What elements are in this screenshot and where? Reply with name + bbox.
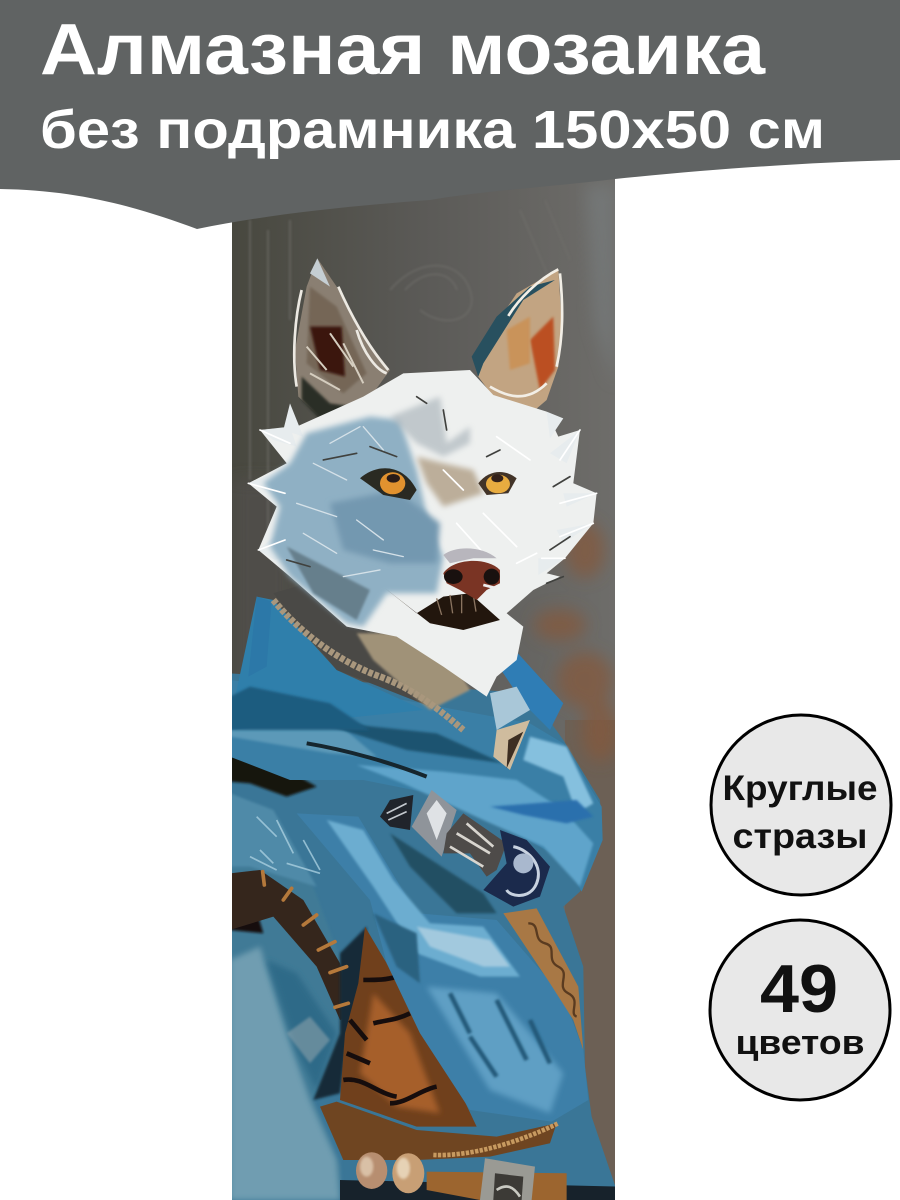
dark folds	[230, 755, 317, 797]
mouth and beard	[385, 588, 500, 630]
left sleeve	[230, 793, 343, 1200]
collar interior	[320, 613, 426, 705]
head fur silhouette	[248, 370, 597, 697]
lacing toggles	[263, 872, 348, 1007]
badge: 49 colours	[710, 920, 890, 1100]
rope collar	[273, 600, 463, 730]
silver buckle	[480, 1158, 535, 1200]
painted background	[232, 170, 618, 1200]
body base	[230, 673, 620, 1200]
badge: round rhinestones: Круглые	[722, 769, 878, 808]
central shirt	[297, 813, 588, 1122]
cloak left part	[230, 597, 423, 730]
blue collar right	[502, 654, 564, 730]
badge: 49 colours: цветов	[736, 1024, 864, 1062]
collar inner	[493, 720, 530, 770]
right ear	[472, 269, 562, 420]
left ear	[294, 258, 390, 427]
belt and rope	[320, 1102, 620, 1200]
round studs	[356, 1152, 424, 1193]
blue-grey shaded side of face	[263, 417, 443, 627]
fur strokes	[248, 430, 597, 563]
sleeve highlights	[250, 817, 320, 873]
left eye	[360, 468, 417, 500]
shadow under arm	[390, 833, 497, 913]
silver arm guard and bracer	[380, 790, 550, 907]
forehead markings	[390, 397, 470, 457]
upper body group	[230, 673, 620, 1200]
tan brow	[417, 457, 483, 507]
carved leather strap	[503, 908, 583, 1050]
portrait painting: dog in blue cloak	[230, 170, 620, 1200]
header banner	[0, 0, 900, 229]
right eye	[478, 472, 517, 495]
badge: 49 colours: 49	[760, 951, 838, 1027]
orange vest	[340, 927, 477, 1127]
badge: round rhinestones	[711, 715, 891, 895]
badge: round rhinestones: стразы	[732, 817, 868, 856]
title: line 2: без подрамника 150х50 см	[40, 100, 825, 160]
title: line 1: Алмазная мозаика	[40, 10, 766, 90]
nose	[443, 548, 500, 600]
scarf	[230, 680, 603, 892]
head group	[230, 258, 597, 730]
